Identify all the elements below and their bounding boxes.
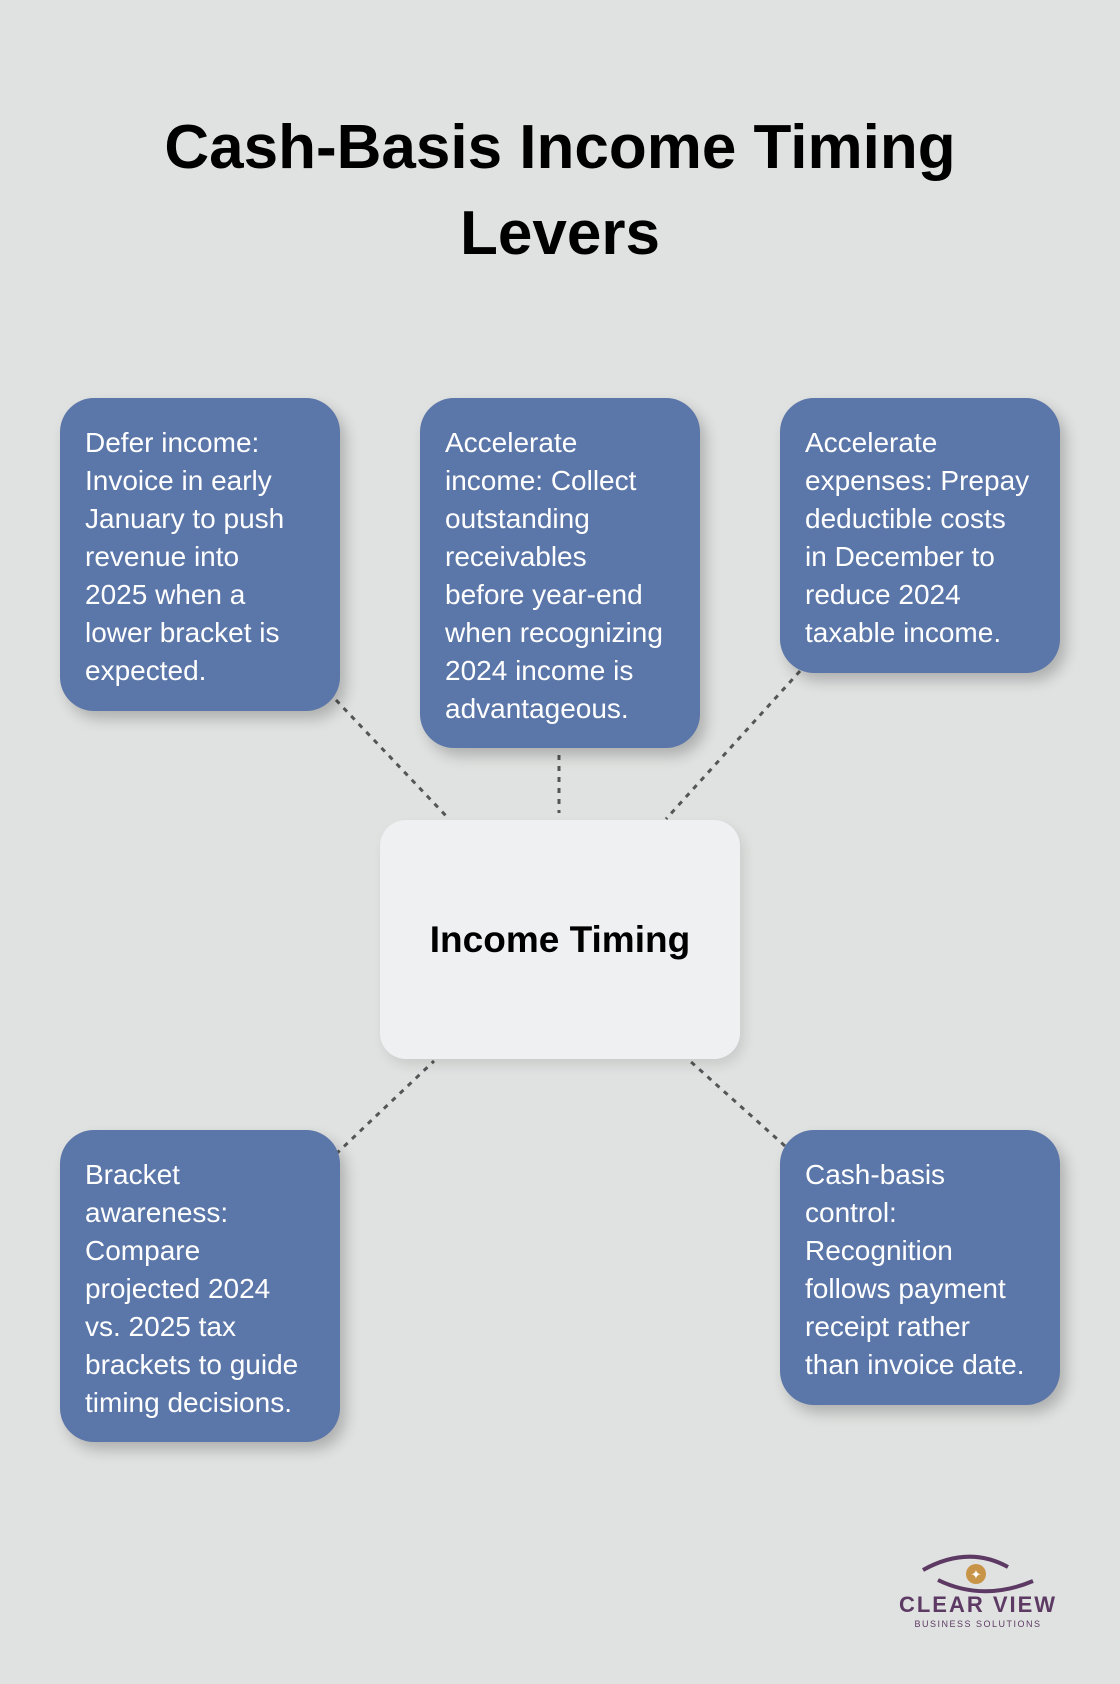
panel: defer income: January to push [85,503,284,534]
panel: accelerate income: advantageous. [445,693,629,724]
panel: accelerate income: 2024 income is [445,655,633,686]
icon: eye [922,1554,1034,1594]
panel: accelerate income: receivables [445,541,587,572]
icon: eye: ✦ [971,1567,982,1582]
panel: cash-basis control: control: [805,1197,897,1228]
panel: bracket awareness: awareness: [85,1197,228,1228]
panel: bracket awareness: projected 2024 [85,1273,270,1304]
panel: accelerate expenses: deductible costs [805,503,1006,534]
panel: bracket awareness [60,1130,340,1442]
title: Levers [460,199,660,268]
panel: accelerate income: Accelerate [445,427,577,458]
panel: accelerate expenses: reduce 2024 [805,579,961,610]
panel: cash-basis control: follows payment [805,1273,1006,1304]
panel: accelerate income [420,398,700,748]
panel: accelerate income: outstanding [445,503,590,534]
logo [899,1554,1057,1629]
panel: cash-basis control: Cash-basis [805,1159,945,1190]
panel: accelerate expenses: taxable income. [805,617,1001,648]
panel: cash-basis control: than invoice date. [805,1349,1024,1380]
panel: defer income: 2025 when a [85,579,245,610]
panel: accelerate expenses [780,398,1060,673]
title: Cash-Basis Income Timing [164,113,956,182]
panel: accelerate income: when recognizing [445,617,663,648]
panel: defer income: Invoice in early [85,465,272,496]
panel: defer income: expected. [85,655,206,686]
panel: bracket awareness: vs. 2025 tax [85,1311,236,1342]
panel: bracket awareness: Compare [85,1235,200,1266]
panel: accelerate expenses: in December to [805,541,995,572]
panel: defer income [60,398,340,711]
title [164,113,956,268]
center node: Income Timing [430,918,690,960]
panel: accelerate income: before year-end [445,579,643,610]
panel: accelerate income: income: Collect [445,465,636,496]
panel: cash-basis control [780,1130,1060,1405]
center node [380,820,740,1059]
panel: defer income: Defer income: [85,427,259,458]
panel: cash-basis control: receipt rather [805,1311,970,1342]
logo: CLEAR VIEW [899,1592,1057,1617]
panel: bracket awareness: brackets to guide [85,1349,298,1380]
panel: defer income: revenue into [85,541,239,572]
panel: accelerate expenses: expenses: Prepay [805,465,1029,496]
panel: defer income: lower bracket is [85,617,280,648]
panel: cash-basis control: Recognition [805,1235,953,1266]
panel: bracket awareness: Bracket [85,1159,180,1190]
panel: bracket awareness: timing decisions. [85,1387,292,1418]
logo: BUSINESS SOLUTIONS [914,1619,1042,1629]
panel: accelerate expenses: Accelerate [805,427,937,458]
